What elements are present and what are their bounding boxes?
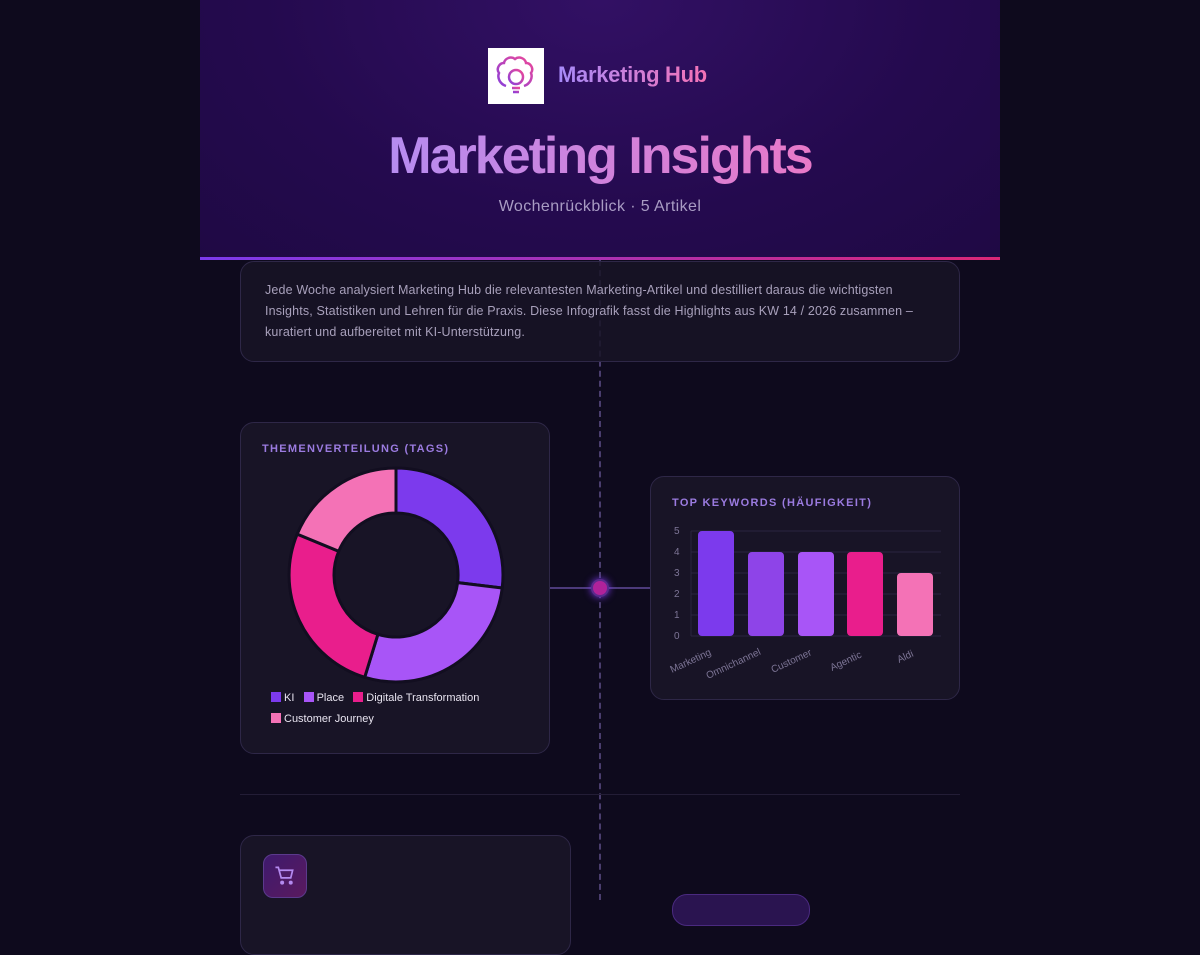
bar chart: Marketing	[669, 647, 713, 676]
brand name: Marketing Hub	[558, 62, 707, 87]
pill badge	[672, 894, 810, 926]
heading: TOP KEYWORDS (HÄUFIGKEIT)	[672, 497, 872, 509]
bar chart: Omnichannel	[705, 647, 763, 682]
legend	[271, 692, 479, 725]
bar chart	[669, 526, 941, 682]
bar chart: 1	[674, 610, 680, 621]
bar chart: Aldi	[896, 649, 915, 666]
bar chart: 4	[674, 547, 680, 558]
bar chart: 2	[674, 589, 680, 600]
donut chart	[290, 470, 502, 680]
legend: KI Place Digitale Transformation	[284, 692, 479, 704]
subtitle: Wochenrückblick · 5 Artikel	[499, 198, 701, 215]
panel: donut	[240, 422, 550, 754]
bar chart: 5	[674, 526, 680, 537]
bar chart: Agentic	[829, 650, 864, 674]
heading: THEMENVERTEILUNG (TAGS)	[262, 443, 449, 455]
panel: bar chart	[650, 476, 960, 700]
timeline line	[599, 260, 601, 900]
title: Marketing Insights	[388, 127, 812, 185]
bar chart: 0	[674, 631, 680, 642]
logo	[488, 48, 544, 104]
header	[200, 0, 1000, 260]
bar chart: Customer	[770, 647, 814, 676]
icon: cart	[263, 854, 307, 898]
intro text	[240, 261, 960, 362]
bar chart: 3	[674, 568, 680, 579]
legend: Customer Journey	[284, 713, 374, 725]
connector	[550, 587, 650, 589]
node dot	[591, 579, 609, 597]
panel: article card	[240, 835, 571, 955]
intro text: Jede Woche analysiert Marketing Hub die relevantesten Marketing-Artikel und destilliert daraus die wichtigsten Insights, Statistiken und Lehren für die Praxis. Diese Infografik fasst die Highlights aus KW 14 / 2026 zusammen – kuratiert und aufbereitet mit KI-Unterstützung.	[265, 283, 913, 339]
